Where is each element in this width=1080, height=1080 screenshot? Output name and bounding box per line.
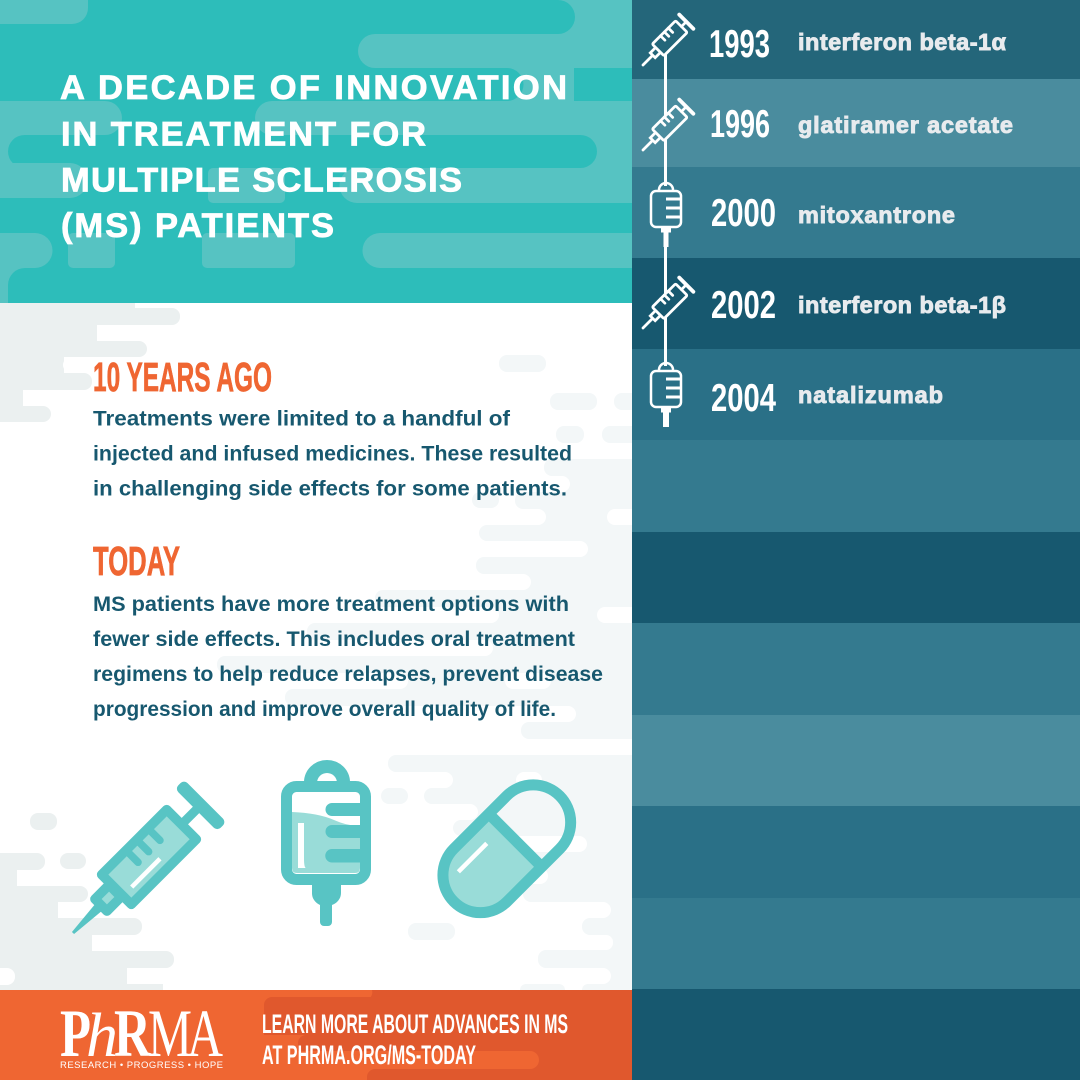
icon: syringe 2002 [636,278,693,335]
logo: PhRMA: M [148,995,192,1071]
timeline entry: 2000: mitoxantrone [798,202,955,228]
text block: 10 years ago [93,408,572,500]
heading: today: TODAY [93,538,180,584]
timeline entry: 2004 [711,377,943,420]
text block: 10 years ago: in challenging side effects for some patients. [93,478,567,500]
text block: 10 years ago: injected and infused medicines. These resulted [93,442,572,466]
title: A DECADE OF INNOVATION [60,69,567,107]
text block: today: fewer side effects. This includes oral treatment [93,628,575,651]
icon: large syringe [52,780,226,954]
title [60,69,567,245]
call to action text: AT PHRMA.ORG/MS-TODAY [262,1040,476,1070]
panel: right timeline bands [632,0,1080,1080]
heading: 10 years ago: 10 YEARS AGO [93,354,272,400]
call to action text: LEARN MORE ABOUT ADVANCES IN MS [262,1009,568,1039]
logo: PhRMA: R [114,995,152,1071]
text block: today: MS patients have more treatment options with [93,593,569,616]
icon: IV bag 2004 [651,363,681,427]
panel: header [0,0,644,303]
text block: 10 years ago: Treatments were limited to a handful of [93,408,511,430]
text block: today [93,593,603,721]
timeline entry: 2000: 2000 [711,192,776,235]
logo: PhRMA: A [187,995,223,1071]
timeline entry: 2002 [711,284,1006,327]
title: (MS) PATIENTS [61,207,334,245]
timeline entry: 1993: interferon beta-1α [798,29,1007,55]
timeline entry: 2004: 2004 [711,377,776,420]
logo: PhRMA: h [86,1002,118,1070]
timeline entry: 1993: 1993 [709,23,770,66]
title: IN TREATMENT FOR [61,116,426,154]
panel: footer [0,990,632,1080]
icon: syringe 1993 [636,15,693,72]
logo: PhRMA [60,995,223,1071]
text block: today: regimens to help reduce relapses, prevent disease [93,663,603,686]
panel: white background blobs [0,303,654,996]
icon: IV bag 2000 [651,183,681,247]
icon: large capsule [427,769,586,928]
timeline line [664,52,667,366]
timeline entry: 1993 [709,23,1007,66]
timeline entry: 2002: interferon beta-1β [798,292,1006,318]
logo: PhRMA: RESEARCH • PROGRESS • HOPE [60,1060,223,1071]
timeline entry: 1996 [710,103,1013,146]
timeline entry: 1996: 1996 [710,103,770,146]
text block: today: progression and improve overall quality of life. [93,698,556,721]
title: MULTIPLE SCLEROSIS [61,162,462,200]
timeline entry: 1996: glatiramer acetate [798,112,1013,138]
call to action text [262,1009,568,1070]
logo: PhRMA: P [60,995,91,1071]
timeline entry: 2000 [711,192,955,235]
timeline entry: 2004: natalizumab [798,382,943,408]
icon: syringe 1996 [636,100,693,157]
icon: large IV bag [286,760,366,926]
timeline entry: 2002: 2002 [711,284,776,327]
